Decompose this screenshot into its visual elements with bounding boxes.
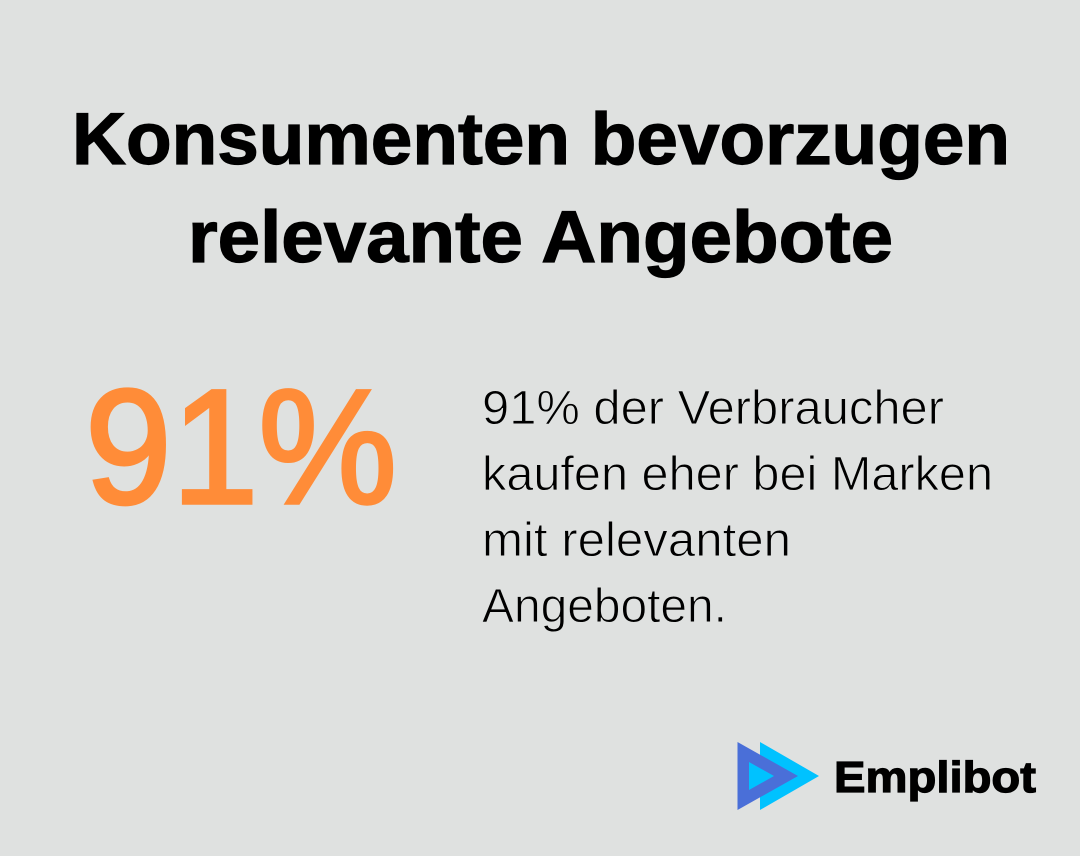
description text: kaufen eher bei Marken bbox=[482, 448, 993, 501]
description text: Angeboten. bbox=[482, 580, 727, 633]
description text bbox=[482, 382, 993, 633]
icon: play triangles bbox=[738, 742, 819, 810]
title: relevante Angebote bbox=[188, 197, 893, 278]
logo wordmark: Emplibot bbox=[834, 753, 1036, 802]
description text: 91% der Verbraucher bbox=[482, 382, 944, 435]
title bbox=[72, 99, 1010, 278]
logo: Emplibot bbox=[738, 742, 1036, 810]
title: Konsumenten bevorzugen bbox=[72, 99, 1010, 180]
description text: mit relevanten bbox=[482, 514, 791, 567]
big statistic: 91%: 91% bbox=[85, 355, 397, 538]
